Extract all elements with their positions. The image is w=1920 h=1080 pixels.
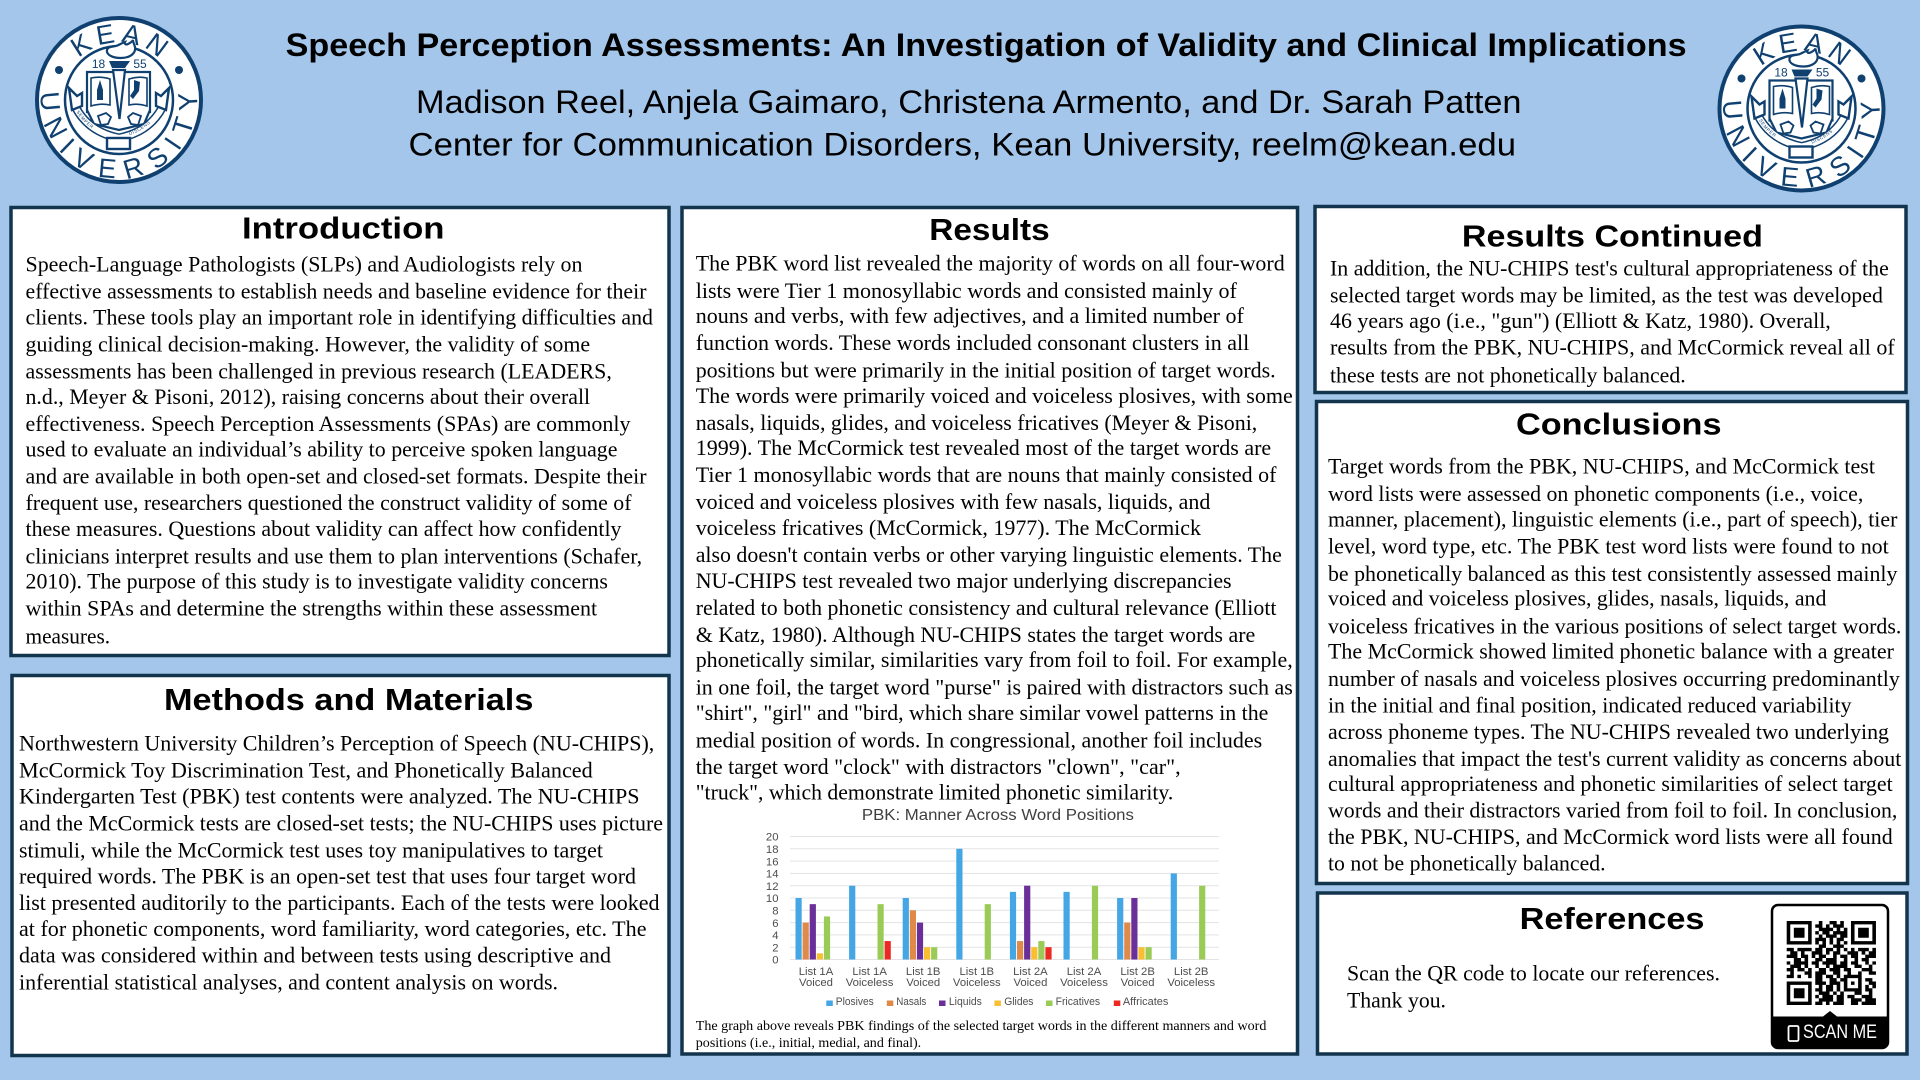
chart legend <box>826 996 1169 1008</box>
y axis labels: 6 <box>772 918 778 930</box>
text block: references note: Thank you. <box>1347 988 1446 1012</box>
x axis labels: Voiceless <box>1167 977 1215 989</box>
x axis labels: List 2B <box>1120 966 1155 978</box>
y axis labels: 2 <box>772 942 778 954</box>
panel: references <box>1318 893 1907 1054</box>
authors and affiliation: Madison Reel, Anjela Gaimaro, Christena Armento, and Dr. Sarah Patten <box>416 84 1522 120</box>
chart caption: positions (i.e., initial, medial, and final). <box>696 1035 921 1050</box>
x axis labels: Voiceless <box>1060 977 1108 989</box>
chart legend: Glides <box>1004 996 1034 1008</box>
text block: conclusions body: voiceless fricatives in the various positions of select target words. <box>1328 613 1901 638</box>
text block: methods body: required words. The PBK is an open-set test that uses four target word <box>19 863 636 888</box>
y axis labels: 12 <box>766 881 778 893</box>
heading: methods and materials: Methods and Materials <box>164 682 533 717</box>
text block: introduction body: and are available in both open-set and closed-set formats. Despite their <box>26 463 647 488</box>
panel: conclusions <box>1316 402 1908 884</box>
logo: Kean University seal, left: KEAN <box>70 24 169 57</box>
y axis labels: 4 <box>772 930 778 942</box>
logo: Kean University seal, left: UNIVERSITY <box>40 92 198 179</box>
text block: methods body <box>19 730 663 995</box>
y axis labels: 14 <box>766 869 778 881</box>
x axis labels: List 2A <box>1067 966 1102 978</box>
text block: results continued body: In addition, the NU-CHIPS test's cultural appropriateness of the <box>1330 256 1889 281</box>
text block: results body: "truck", which demonstrate limited phonetic similarity. <box>696 780 1173 805</box>
text block: introduction body: assessments has been challenged in previous research (LEADERS, <box>26 358 612 383</box>
icon: phone <box>1788 1026 1798 1041</box>
y axis labels: 10 <box>766 893 778 905</box>
chart legend: Liquids <box>949 996 982 1008</box>
text block: results body: phonetically similar, similarities vary from foil to foil. For example, <box>696 647 1293 672</box>
bars: affricates <box>885 941 1052 960</box>
logo: Kean University seal, left <box>35 16 203 184</box>
bars: nasals <box>803 910 1130 960</box>
text block: results body: positions but were primarily in the initial position of target words. <box>696 357 1276 382</box>
y axis labels: 16 <box>766 856 778 868</box>
panel: results continued <box>1315 206 1906 392</box>
text block: results body: nouns and verbs, with few adjectives, and a limited number of <box>696 303 1244 328</box>
text block: results continued body: these tests are not phonetically balanced. <box>1330 362 1686 387</box>
text block: introduction body: effectiveness. Speech Perception Assessments (SPAs) are commonly <box>26 411 631 436</box>
text block: conclusions body: word lists were assessed on phonetic components (i.e., voice, <box>1328 481 1863 506</box>
text block: methods body: data was considered within and between tests using descriptive and <box>19 942 611 967</box>
x axis labels: List 1B <box>906 966 940 978</box>
x axis labels: List 1A <box>852 966 887 978</box>
logo: Kean University seal, right: SEMPER DISCENS <box>1759 119 1832 144</box>
logo: Kean University seal, left: 18 <box>92 57 105 71</box>
text block: conclusions body: number of nasals and voiceless plosives occurring predominantly <box>1328 666 1901 691</box>
text block: results body: "shirt", "girl" and "bird, which share similar vowel patterns in the <box>696 700 1268 725</box>
logo: Kean University seal, right: KEAN <box>1752 32 1852 66</box>
text block: introduction body: clinicians interpret results and use them to plan interventions (Schafer, <box>26 543 642 568</box>
text block: conclusions body: across phoneme types. The NU-CHIPS revealed two underlying <box>1328 719 1889 744</box>
text block: results continued body: results from the PBK, NU-CHIPS, and McCormick reveal all of <box>1330 334 1895 359</box>
text block: conclusions body: the PBK, NU-CHIPS, and McCormick word lists were all found <box>1328 824 1893 849</box>
text block: results body: the target word "clock" with distractors "clown", "car", <box>696 754 1181 779</box>
text block: results body: The PBK word list revealed the majority of words on all four-word <box>696 251 1285 276</box>
text block: results body: The words were primarily voiced and voiceless plosives, with some <box>696 383 1293 408</box>
text block: methods body: Kindergarten Test (PBK) test contents were analyzed. The NU-CHIPS <box>19 784 640 809</box>
bars: liquids <box>810 886 1138 960</box>
text block: conclusions body: anomalies that impact the test's current validity as concerns about <box>1328 746 1902 771</box>
heading: results continued: Results Continued <box>1462 219 1763 254</box>
text block: results body: & Katz, 1980). Although NU-CHIPS states the target words are <box>696 622 1255 647</box>
text block: results body: function words. These words included consonant clusters in all <box>696 330 1249 355</box>
text block: results body: related to both phonetic consistency and cultural relevance (Elliott <box>696 595 1277 620</box>
text block: results continued body <box>1330 256 1895 387</box>
text block: introduction body: 2010). The purpose of this study is to investigate validity concerns <box>26 569 608 594</box>
authors and affiliation: Center for Communication Disorders, Kean University, reelm@kean.edu <box>408 126 1516 162</box>
chart caption <box>696 1018 1267 1050</box>
text block: results body: also doesn't contain verbs or other varying linguistic elements. The <box>696 542 1282 567</box>
text block: conclusions body: be phonetically balanced as this test consistently assessed mainly <box>1328 561 1898 586</box>
text block: methods body: and the McCormick tests are closed-set tests; the NU-CHIPS uses picture <box>19 810 663 835</box>
text block: methods body: McCormick Toy Discrimination Test, and Phonetically Balanced <box>19 757 593 782</box>
x axis labels: Voiceless <box>953 977 1001 989</box>
text block: conclusions body: voiced and voiceless plosives, glides, nasals, liquids, and <box>1328 586 1826 611</box>
text block: introduction body: frequent use, researchers questioned the construct validity of some of <box>26 490 632 515</box>
text block: introduction body: measures. <box>26 623 110 648</box>
text block: conclusions body: in the initial and final position, indicated reduced variability <box>1328 693 1852 718</box>
x axis labels: List 1A <box>799 966 834 978</box>
chart legend: Fricatives <box>1056 996 1100 1008</box>
text block: introduction body: within SPAs and determine the strengths within these assessment <box>26 595 598 620</box>
text block: conclusions body: words and their distractors varied from foil to foil. In conclusion, <box>1328 797 1897 822</box>
QR code with scan me badge <box>1772 905 1888 1048</box>
x axis labels: List 1B <box>960 966 994 978</box>
logo: Kean University seal, left: 55 <box>133 57 147 71</box>
chart legend: Affricates <box>1123 996 1169 1008</box>
text block: conclusions body: level, word type, etc. The PBK test word lists were found to not <box>1328 533 1890 558</box>
x axis labels: Voiceless <box>846 977 894 989</box>
text block: results body: voiced and voiceless plosives with few nasals, liquids, and <box>696 489 1210 514</box>
bar chart: PBK manner across word positions <box>766 807 1219 1008</box>
text block: conclusions body: manner, placement), linguistic elements (i.e., part of speech), tier <box>1328 507 1898 532</box>
text block: references note <box>1347 960 1720 1012</box>
chart title: PBK: Manner Across Word Positions <box>862 807 1134 824</box>
text block: conclusions body: cultural appropriateness and phonetic similarities of select target <box>1328 771 1893 796</box>
panel: methods and materials <box>12 676 669 1056</box>
text block: results body: NU-CHIPS test revealed two major underlying discrepancies <box>696 568 1232 593</box>
y axis labels: 8 <box>772 905 778 917</box>
x axis labels: List 2A <box>1013 966 1048 978</box>
x axis labels: Voiced <box>906 977 940 989</box>
text block: conclusions body <box>1328 453 1902 876</box>
text block: introduction body: clients. These tools play an important role in identifying difficulties and <box>26 304 653 329</box>
x axis labels: Voiced <box>1121 977 1155 989</box>
text block: conclusions body: The McCormick showed limited phonetic balance with a greater <box>1328 639 1894 664</box>
text block: introduction body: Speech-Language Pathologists (SLPs) and Audiologists rely on <box>26 252 582 277</box>
text block: results body: medial position of words. In congressional, another foil includes <box>696 727 1262 752</box>
y axis labels: 18 <box>766 844 778 856</box>
text block: introduction body <box>26 252 653 648</box>
text block: methods body: Northwestern University Children’s Perception of Speech (NU-CHIPS), <box>19 730 654 755</box>
heading: references: References <box>1520 901 1704 936</box>
text block: introduction body: used to evaluate an individual’s ability to perceive spoken language <box>26 437 618 462</box>
chart legend: Nasals <box>896 996 927 1008</box>
text block: methods body: stimuli, while the McCormick test uses toy manipulatives to target <box>19 837 604 862</box>
scan me label: SCAN ME <box>1803 1022 1877 1043</box>
text block: introduction body: these measures. Questions about validity can affect how confidently <box>26 516 622 541</box>
text block: methods body: inferential statistical analyses, and content analysis on words. <box>19 970 558 995</box>
x axis labels <box>799 966 1215 989</box>
text block: introduction body: guiding clinical decision-making. However, the validity of some <box>26 332 590 357</box>
bars: fricatives <box>824 886 1205 960</box>
text block: conclusions body: to not be phonetically balanced. <box>1328 851 1606 876</box>
title: Speech Perception Assessments: An Investigation of Validity and Clinical Implications <box>286 27 1687 63</box>
text block: results body: voiceless fricatives (McCormick, 1977). The McCormick <box>696 515 1202 540</box>
logo: Kean University seal, right: 18 <box>1774 66 1788 80</box>
text block: results continued body: selected target words may be limited, as the test was developed <box>1330 283 1883 308</box>
text block: methods body: at for phonetic components, word familiarity, word categories, etc. The <box>19 916 647 941</box>
logo: Kean University seal, left: SEMPER DISCENS <box>76 110 150 135</box>
bars: plosives <box>796 849 1177 960</box>
authors and affiliation <box>408 84 1522 162</box>
x axis labels: Voiced <box>1013 977 1047 989</box>
y axis labels: 20 <box>766 832 778 844</box>
heading: introduction: Introduction <box>242 210 444 245</box>
heading: results: Results <box>929 212 1050 247</box>
text block: results body: in one foil, the target word "purse" is paired with distractors such as <box>696 675 1293 700</box>
x axis labels: Voiced <box>799 977 833 989</box>
y axis labels <box>766 832 778 967</box>
y axis labels: 0 <box>772 955 778 967</box>
text block: references note: Scan the QR code to locate our references. <box>1347 960 1720 986</box>
text block: results body: lists were Tier 1 monosyllabic words and consisted mainly of <box>696 278 1237 303</box>
text block: conclusions body: Target words from the PBK, NU-CHIPS, and McCormick test <box>1328 453 1876 478</box>
logo: Kean University seal, right <box>1718 24 1886 192</box>
text block: results body <box>696 251 1293 805</box>
panel: introduction <box>11 208 669 656</box>
bars: glides <box>817 947 1145 960</box>
text block: results body: Tier 1 monosyllabic words that are nouns that mainly consisted of <box>696 462 1277 487</box>
chart legend: Plosives <box>836 996 874 1008</box>
text block: introduction body: n.d., Meyer & Pisoni, 2012), raising concerns about their overall <box>26 384 590 409</box>
text block: methods body: list presented auditorily to the participants. Each of the tests were looked <box>19 890 660 915</box>
panel: results <box>682 208 1298 1054</box>
logo: Kean University seal, right: 55 <box>1816 66 1829 80</box>
text block: results body: 1999). The McCormick test revealed most of the target words are <box>696 435 1271 460</box>
chart caption: The graph above reveals PBK findings of the selected target words in the different manners and word <box>696 1018 1267 1033</box>
heading: conclusions: Conclusions <box>1516 406 1722 441</box>
text block: results body: nasals, liquids, glides, and voiceless fricatives (Meyer & Pisoni, <box>696 410 1257 435</box>
text block: introduction body: effective assessments to establish needs and baseline evidence for their <box>26 278 647 303</box>
x axis labels: List 2B <box>1174 966 1208 978</box>
logo: Kean University seal, right: UNIVERSITY <box>1723 101 1880 188</box>
text block: results continued body: 46 years ago (i.e., "gun") (Elliott & Katz, 1980). Overall, <box>1330 308 1831 333</box>
